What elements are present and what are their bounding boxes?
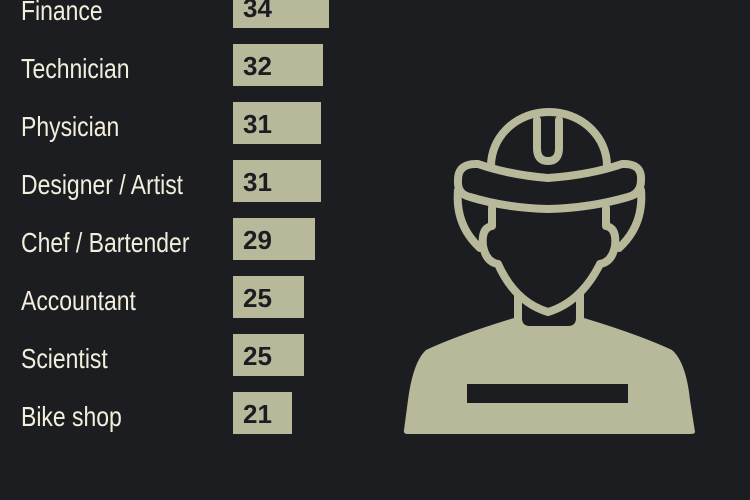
bar chart (21, 0, 329, 434)
row: Chef / Bartender: 29 (243, 225, 272, 255)
row: Technician: Technician (21, 53, 129, 84)
row: Finance (21, 0, 329, 28)
row: Physician: Physician (21, 111, 119, 142)
row: Accountant (21, 276, 304, 318)
row: Accountant: 25 (243, 283, 272, 313)
row: Designer / Artist: Designer / Artist (21, 169, 183, 200)
row: Designer / Artist (21, 160, 321, 202)
row: Technician (21, 44, 323, 86)
row: Designer / Artist: 31 (243, 167, 272, 197)
row: Accountant: Accountant (21, 285, 136, 316)
row: Bike shop: Bike shop (21, 401, 122, 432)
row: Chef / Bartender (21, 218, 315, 260)
row: Scientist: Scientist (21, 343, 108, 374)
row: Bike shop (21, 392, 292, 434)
row: Physician (21, 102, 321, 144)
row: Physician: 31 (243, 109, 272, 139)
row: Chef / Bartender: Chef / Bartender (21, 227, 189, 258)
row: Bike shop: 21 (243, 399, 272, 429)
row: Scientist: 25 (243, 341, 272, 371)
row: Scientist (21, 334, 304, 376)
row: Technician: 32 (243, 51, 272, 81)
